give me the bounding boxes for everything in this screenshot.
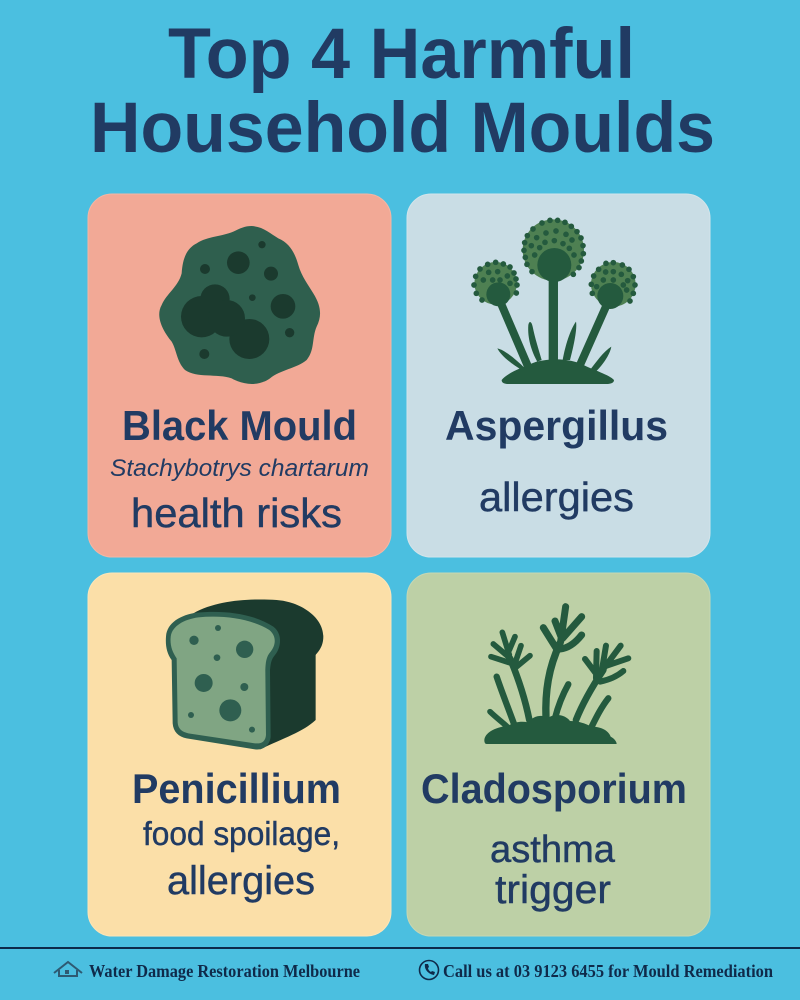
text: asthma trigger	[490, 829, 616, 912]
text: health risks: health risks	[131, 490, 342, 536]
latin name: Stachybotrys chartarum	[110, 455, 369, 482]
icon: black mould blob	[159, 226, 320, 384]
panel: Black Mould	[88, 194, 391, 557]
title: Household Moulds	[90, 89, 715, 168]
icon: aspergillus	[474, 219, 636, 384]
panel: Penicillium	[88, 573, 391, 936]
footer text: call: Call us at 03 9123 6455 for Mould Remediation	[443, 961, 773, 981]
icon: mouldy bread	[166, 599, 323, 750]
text: food spoilage, allergies	[143, 815, 340, 903]
text: food spoilage, allergies: allergies	[167, 859, 315, 903]
text: allergies: allergies	[479, 474, 634, 520]
footer	[0, 947, 800, 981]
heading: Aspergillus: Aspergillus	[445, 402, 668, 449]
text: food spoilage, allergies: food spoilage,	[143, 815, 340, 852]
title: Top 4 Harmful	[168, 15, 635, 94]
footer text: company: Water Damage Restoration Melbourne	[89, 961, 360, 981]
icon: cladosporium	[484, 607, 628, 744]
icon: phone	[420, 960, 438, 980]
icon: house	[54, 962, 82, 976]
heading: Penicillium: Penicillium	[132, 765, 341, 812]
text: asthma trigger: trigger	[495, 868, 611, 912]
heading: Cladosporium: Cladosporium	[421, 765, 687, 812]
panel: Cladosporium	[407, 573, 710, 936]
panel: Aspergillus	[407, 194, 710, 557]
heading: Black Mould: Black Mould	[122, 402, 357, 449]
text: asthma trigger: asthma	[490, 829, 616, 871]
title	[90, 15, 715, 168]
